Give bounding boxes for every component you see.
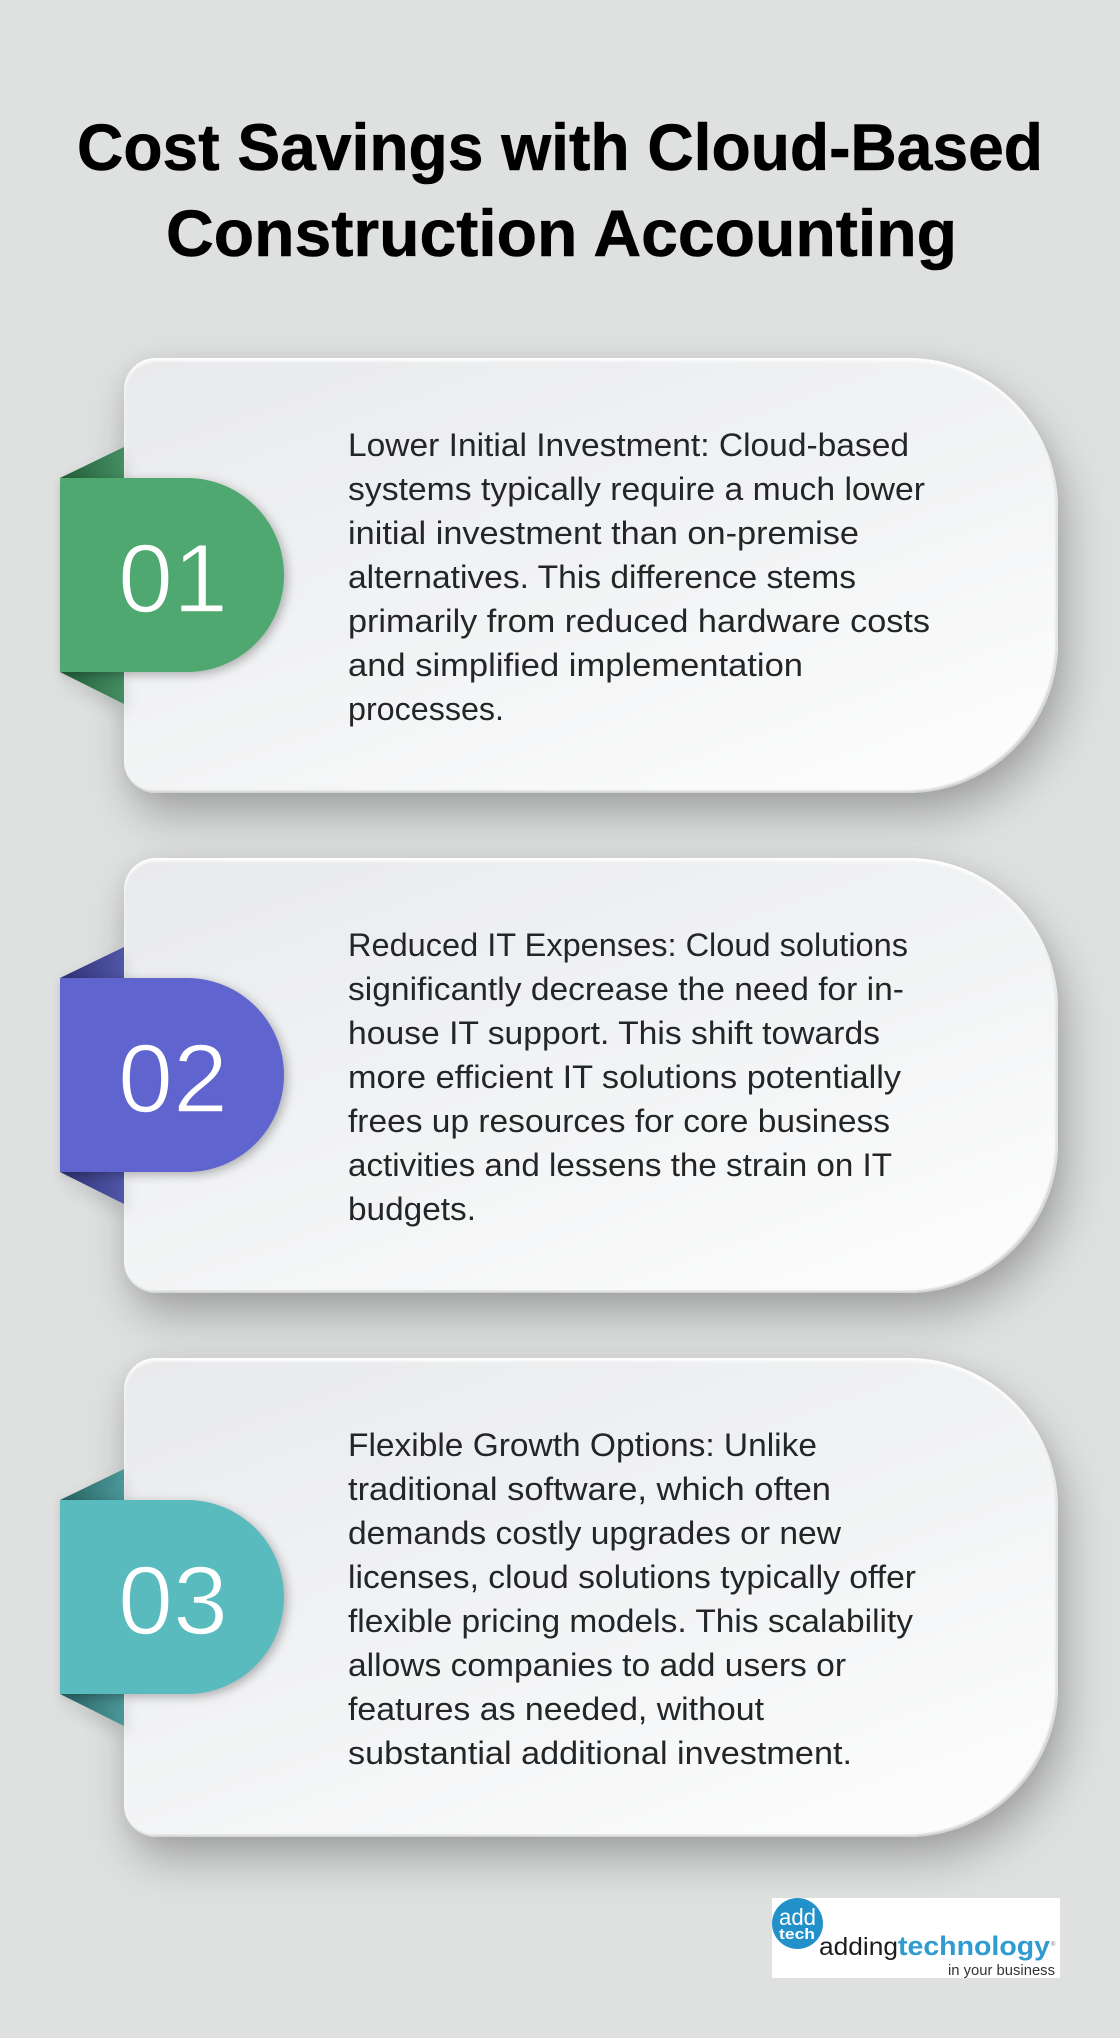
text: step 01 description: alternatives. This difference stems [348, 559, 856, 595]
text: step 02 description: activities and lessens the strain on IT [348, 1147, 892, 1183]
text: step 03 description: allows companies to add users or [348, 1647, 846, 1683]
text: step 03 description: demands costly upgrades or new [348, 1515, 842, 1551]
logo: adding technology: technology [898, 1931, 1050, 1961]
title: Cost Savings with Cloud-Based [77, 110, 1043, 184]
panel: step 01 lower initial investment [57, 352, 1089, 838]
card background [124, 358, 1058, 793]
text: step 01 description: Lower Initial Investment: Cloud-based [348, 427, 909, 463]
text: step 03 description: Flexible Growth Options: Unlike [348, 1427, 817, 1463]
text: step 02 description: significantly decrease the need for in- [348, 971, 904, 1007]
text: step 01 description: systems typically require a much lower [348, 471, 925, 507]
text: step 02 description [348, 927, 908, 1227]
text: step 03 description [348, 1427, 916, 1771]
text: step 03 description: flexible pricing models. This scalability [348, 1603, 914, 1639]
logo: adding technology: ® [1051, 1941, 1056, 1948]
number tab 02 [60, 978, 284, 1172]
logo: adding technology: tech [779, 1926, 815, 1943]
text: step 01 description: processes. [348, 691, 504, 727]
number tab 02: 02 [118, 1024, 228, 1133]
ribbon folds [60, 947, 124, 1204]
text: step 03 description: features as needed, without [348, 1691, 764, 1727]
text: step 01 description: and simplified implementation [348, 647, 803, 683]
text: step 02 description: budgets. [348, 1191, 476, 1227]
number tab 03: 03 [118, 1546, 228, 1655]
title: Construction Accounting [166, 196, 957, 270]
text: step 02 description: Reduced IT Expenses: Cloud solutions [348, 927, 908, 963]
logo: adding technology [772, 1898, 1060, 1978]
number tab 01 [60, 478, 284, 672]
text: step 03 description: substantial additional investment. [348, 1735, 852, 1771]
text: step 01 description: primarily from reduced hardware costs [348, 603, 930, 639]
number tab 01: 01 [118, 524, 228, 633]
text: step 01 description: initial investment than on-premise [348, 515, 859, 551]
number tab 03 [60, 1500, 284, 1694]
text: step 03 description: licenses, cloud solutions typically offer [348, 1559, 916, 1595]
ribbon folds [60, 1469, 124, 1726]
title [77, 110, 1043, 270]
logo: adding technology: add [779, 1904, 816, 1930]
text: step 01 description [348, 427, 930, 727]
text: step 03 description: traditional software, which often [348, 1471, 831, 1507]
text: step 02 description: house IT support. This shift towards [348, 1015, 880, 1051]
card background [124, 1358, 1058, 1837]
ribbon folds [60, 447, 124, 704]
panel: step 02 reduced IT expenses [57, 852, 1089, 1338]
logo: adding technology: adding [819, 1933, 898, 1961]
card background [124, 858, 1058, 1293]
text: step 02 description: more efficient IT solutions potentially [348, 1059, 902, 1095]
text: step 02 description: frees up resources for core business [348, 1103, 890, 1139]
panel: step 03 flexible growth options [57, 1352, 1089, 1882]
